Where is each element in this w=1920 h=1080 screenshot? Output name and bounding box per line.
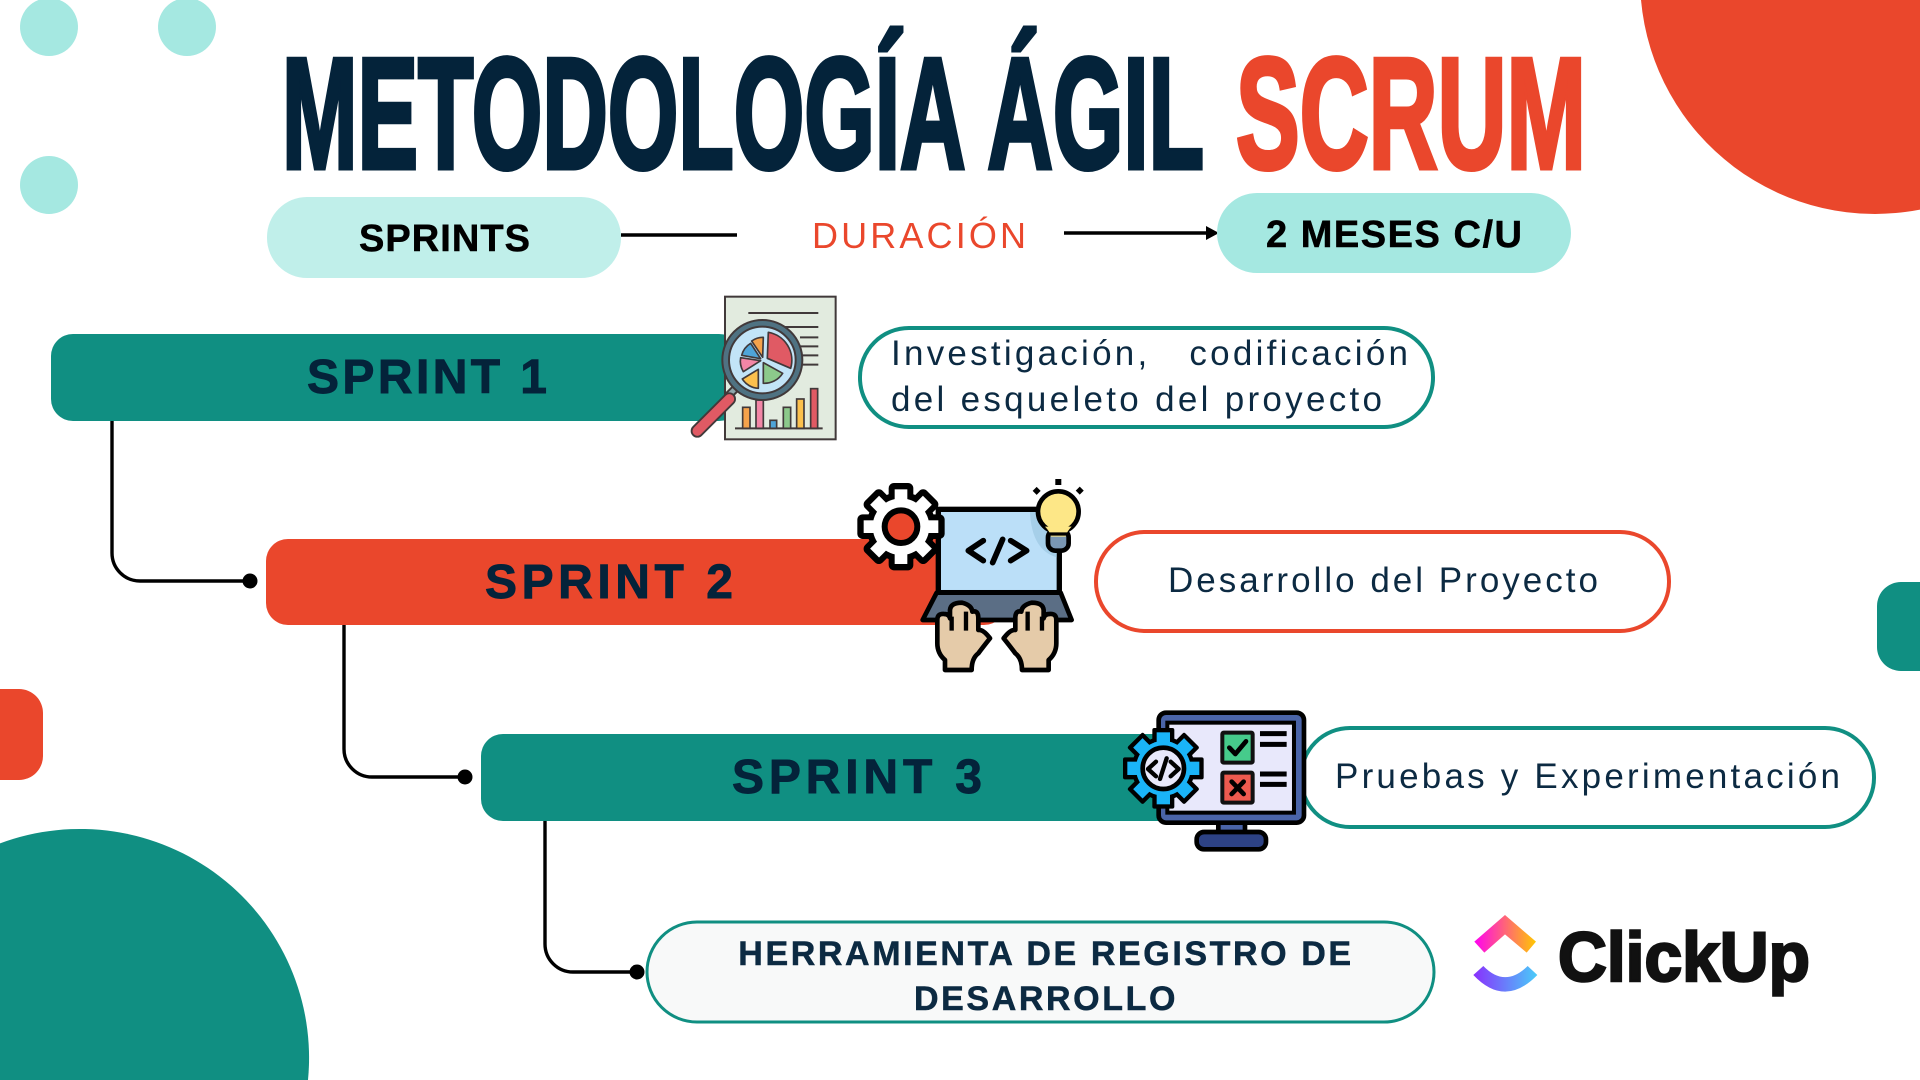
sprint 1 description: Investigación, codificación (891, 334, 1408, 373)
sprint 2 description (1096, 532, 1669, 631)
sprint 2 description: Desarrollo del Proyecto (1168, 561, 1598, 600)
connector: sprint 1 to sprint 2 (112, 420, 258, 588)
gear (857, 483, 945, 570)
hands (937, 603, 990, 670)
decorative dots top left (20, 0, 216, 214)
pill: duration value: 2 MESES C/U (1266, 214, 1522, 256)
tool box: HERRAMIENTA DE REGISTRO DE (738, 935, 1354, 973)
sprint 2 bar (266, 539, 1006, 625)
duration label: DURACIÓN (812, 215, 1026, 256)
sprint 1 bar (51, 334, 741, 421)
arrow to duration value (1064, 226, 1219, 240)
title: METODOLOGÍA ÁGIL (282, 26, 1204, 202)
pill: duration value (1217, 193, 1571, 273)
decorative tab left (0, 689, 43, 780)
icon: monitor with checklist and gear (1123, 713, 1304, 849)
sprint 3 bar: SPRINT 3 (732, 751, 982, 804)
pill: sprints (267, 197, 621, 278)
bulb (1048, 530, 1069, 551)
connector: sprint 2 to sprint 3 (344, 625, 472, 784)
sprint 1 description (860, 328, 1433, 427)
icon: report with magnifier (697, 297, 836, 439)
decorative circle top right (1641, 0, 1920, 214)
decorative circle bottom left (0, 829, 309, 1080)
sprint 3 description: Pruebas y Experimentación (1335, 757, 1840, 796)
sprint 1 description: del esqueleto del proyecto (891, 380, 1382, 419)
sprint 2 bar: SPRINT 2 (485, 556, 733, 609)
connector: sprint 3 to tool (545, 821, 644, 980)
sprint 3 bar (481, 734, 1181, 821)
decorative tab right (1877, 582, 1920, 671)
line from sprints to duration (621, 233, 737, 237)
tool box (647, 922, 1434, 1022)
logo: ClickUp: ClickUp (1558, 918, 1810, 996)
title: SCRUM (1236, 26, 1586, 202)
tool box: DESARROLLO (914, 980, 1178, 1018)
sprint 3 description (1301, 728, 1874, 827)
icon: laptop with code, gear and bulb (857, 479, 1084, 670)
pill: sprints: SPRINTS (359, 218, 530, 260)
sprint 1 bar: SPRINT 1 (307, 351, 547, 404)
